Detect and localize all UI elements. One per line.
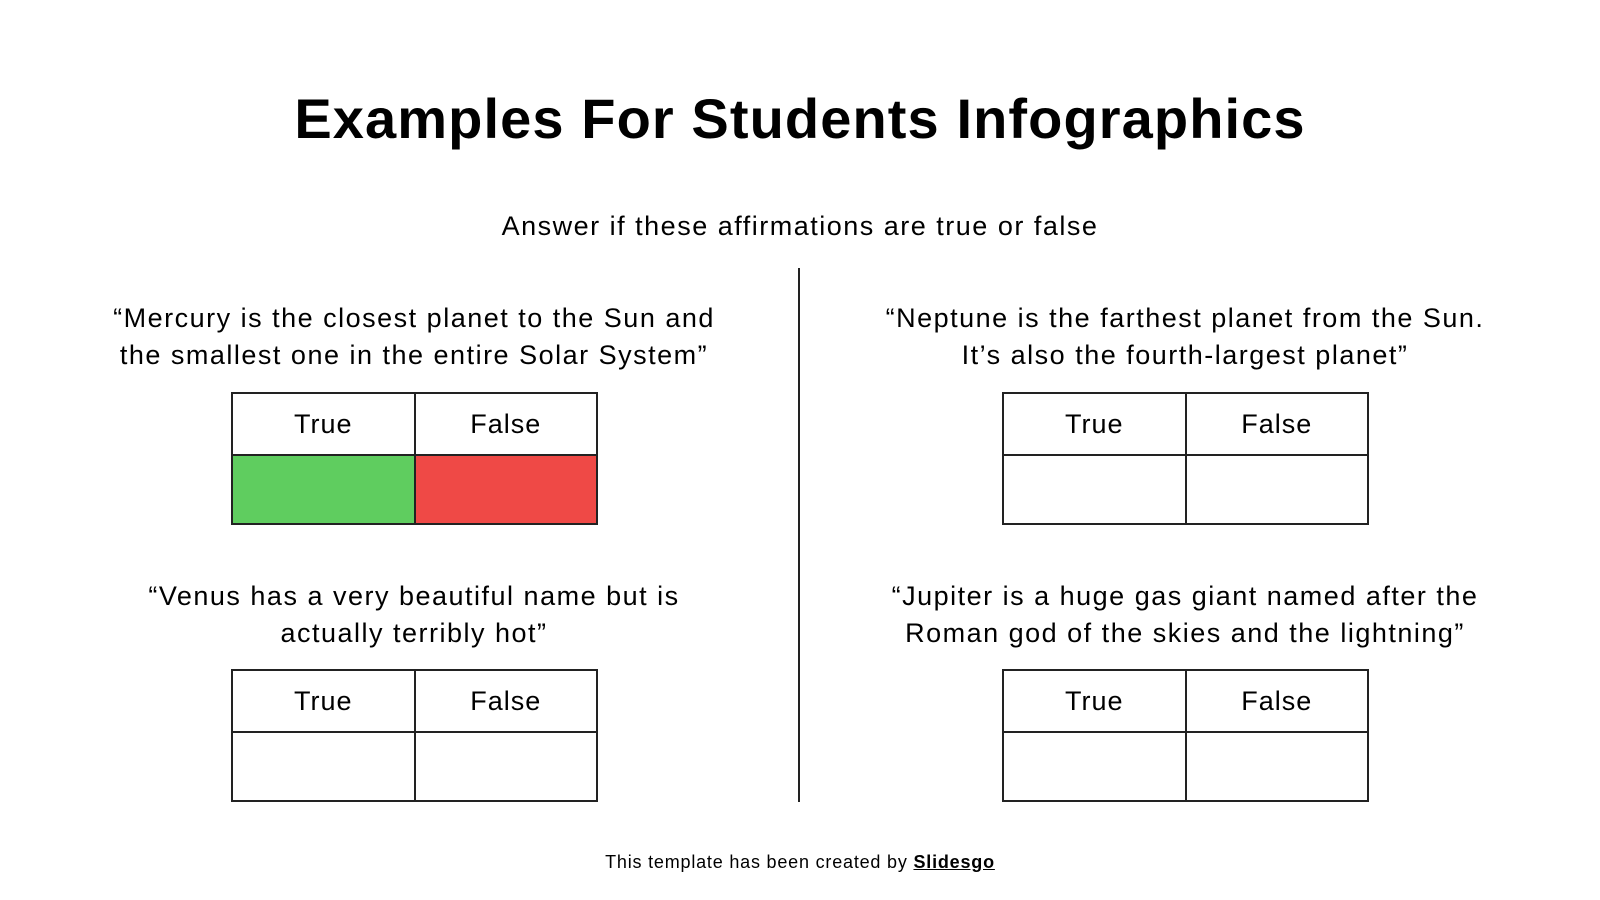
- quote: venus: “Venus has a very beautiful name but is: [148, 581, 680, 611]
- quote: mercury: “Mercury is the closest planet to the Sun and: [113, 303, 715, 333]
- table: jupiter: True: [1065, 686, 1124, 716]
- quote: mercury: the smallest one in the entire Solar System”: [120, 340, 708, 370]
- divider: [798, 268, 800, 802]
- quote: jupiter: Roman god of the skies and the lightning”: [905, 618, 1465, 648]
- table: jupiter: False: [1241, 686, 1312, 716]
- table: neptune: True: [1065, 408, 1124, 438]
- footer: This template has been created by Slidesgo: [605, 852, 995, 872]
- table: neptune: [1002, 392, 1369, 525]
- table: neptune: False: [1241, 408, 1312, 438]
- table: venus: [231, 669, 598, 802]
- title: Examples For Students Infographics: [294, 87, 1306, 150]
- table: venus: True: [294, 686, 352, 716]
- quote: mercury: [113, 303, 715, 370]
- quote: neptune: “Neptune is the farthest planet from the Sun.: [886, 303, 1484, 333]
- table: venus: False: [470, 686, 541, 716]
- table: mercury: False: [470, 408, 541, 438]
- quote: jupiter: [892, 581, 1478, 648]
- table: jupiter: [1002, 669, 1369, 802]
- table: mercury: True: [294, 408, 352, 438]
- table: mercury: [231, 392, 598, 525]
- quote: venus: actually terribly hot”: [280, 618, 548, 648]
- quote: neptune: [886, 303, 1484, 370]
- quote: venus: [148, 581, 680, 648]
- quote: jupiter: “Jupiter is a huge gas giant named after the: [892, 581, 1478, 611]
- subtitle: Answer if these affirmations are true or false: [502, 211, 1098, 241]
- quote: neptune: It’s also the fourth-largest planet”: [962, 340, 1408, 370]
